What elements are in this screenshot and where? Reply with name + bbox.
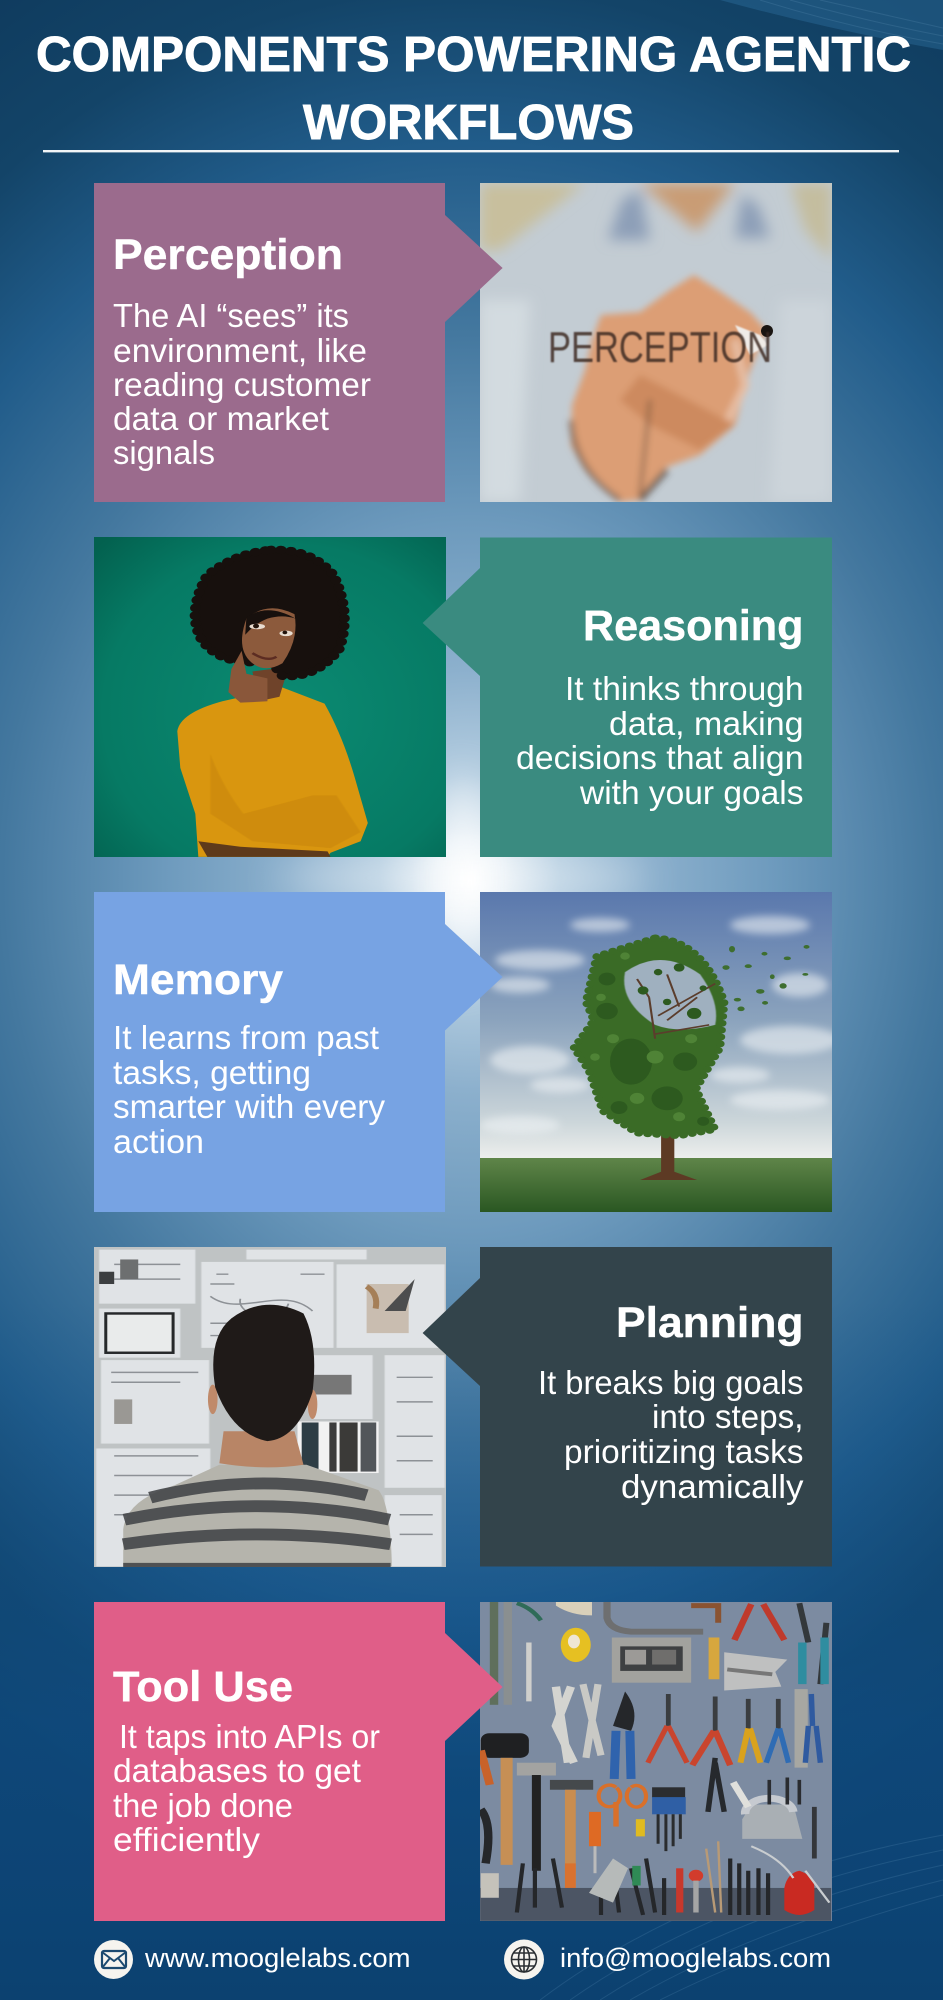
- hand: [228, 651, 267, 703]
- neck: [219, 1431, 304, 1467]
- hair: [195, 550, 344, 676]
- panel: memory: [94, 892, 840, 1212]
- body: perception: environment, like: [113, 332, 367, 369]
- body: planning: [538, 1364, 804, 1505]
- body: perception: data or market: [113, 400, 329, 437]
- man's sweater: [123, 1465, 392, 1566]
- footer: website contact: [94, 1940, 410, 1979]
- bottom clutter: [480, 1888, 831, 1921]
- icon: envelope: [94, 1940, 133, 1979]
- body: reasoning: [516, 670, 804, 811]
- body: reasoning: data, making: [609, 705, 804, 742]
- photo: tree shaped like a head: [480, 892, 840, 1212]
- body: tool use: databases to get: [113, 1752, 361, 1789]
- body: perception: reading customer: [113, 366, 371, 403]
- heading: memory: Memory: [113, 956, 283, 1004]
- face: [242, 608, 296, 668]
- sweater: [177, 688, 368, 857]
- body: tool use: It taps into APIs or: [119, 1718, 380, 1755]
- body: planning: prioritizing tasks: [564, 1433, 804, 1470]
- neck: [252, 669, 285, 700]
- heading: tool use: Tool Use: [113, 1663, 293, 1711]
- heading: planning: Planning: [616, 1299, 804, 1347]
- body: reasoning: with your goals: [579, 774, 804, 811]
- body: memory: tasks, getting: [113, 1054, 311, 1091]
- body: planning: It breaks big goals: [538, 1364, 804, 1401]
- footer: website contact: www.mooglelabs.com: [144, 1943, 410, 1973]
- heading: reasoning: Reasoning: [583, 602, 804, 650]
- title: COMPONENTS POWERING AGENTIC: [36, 28, 911, 82]
- heading: perception: Perception: [113, 231, 343, 279]
- body: reasoning: It thinks through: [565, 670, 804, 707]
- body: perception: The AI “sees” its: [113, 297, 349, 334]
- panel: perception: [94, 183, 503, 502]
- footer: email contact: [504, 1940, 831, 1980]
- title: WORKFLOWS: [303, 96, 634, 150]
- title: [36, 28, 911, 150]
- photo: tools on a pegboard: [480, 1602, 832, 1921]
- panel: tool use: [94, 1602, 503, 1921]
- panel: reasoning: [423, 538, 832, 857]
- photo: thinking woman on green: [94, 537, 446, 857]
- body: perception: signals: [113, 434, 215, 471]
- body: tool use: efficiently: [113, 1821, 261, 1858]
- icon: globe: [504, 1940, 544, 1980]
- hair: [213, 1305, 314, 1441]
- handwritten PERCEPTION label: PERCEPTION: [548, 323, 772, 372]
- body: tool use: [113, 1718, 380, 1858]
- body: memory: [113, 1019, 386, 1160]
- body: memory: action: [113, 1123, 204, 1160]
- body: planning: into steps,: [652, 1398, 804, 1435]
- body: memory: smarter with every: [113, 1088, 386, 1125]
- photo: hand writing PERCEPTION: [480, 183, 832, 502]
- footer: email contact: info@mooglelabs.com: [560, 1943, 831, 1973]
- body: planning: dynamically: [621, 1468, 804, 1505]
- panel: planning: [423, 1247, 832, 1566]
- body: perception: [113, 297, 371, 471]
- body: tool use: the job done: [113, 1787, 293, 1824]
- photo: man facing a wall of papers: [94, 1247, 446, 1569]
- body: memory: It learns from past: [113, 1019, 379, 1056]
- body: reasoning: decisions that align: [516, 739, 804, 776]
- title underline: [43, 150, 899, 152]
